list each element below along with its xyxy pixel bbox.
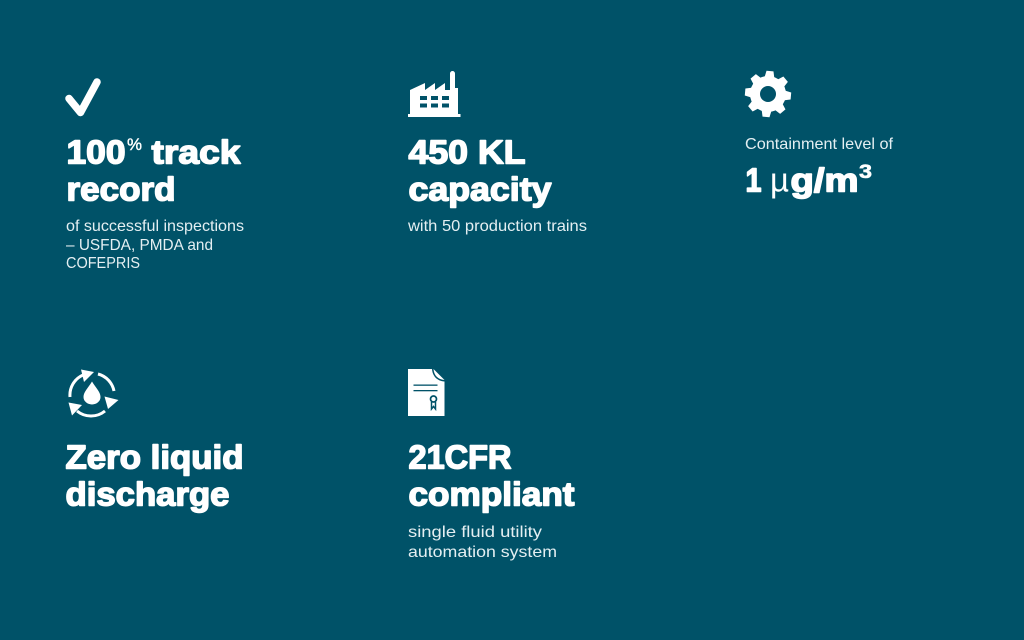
icon: factory <box>408 71 460 117</box>
heading: 450 KL capacity: 450 KL <box>408 134 526 170</box>
heading: 100% track record: % <box>127 135 142 154</box>
text: inspections detail: – USFDA, PMDA and <box>66 237 213 254</box>
icon: recycling water drop <box>68 370 118 416</box>
panel: containment <box>745 71 894 200</box>
text: inspections detail: of successful inspections <box>66 218 244 235</box>
panel: capacity <box>407 71 587 235</box>
icon: gear <box>745 71 791 117</box>
panel: track record <box>66 82 244 272</box>
heading: Zero liquid discharge: discharge <box>66 476 230 512</box>
heading: 1 µg/m³: 3 <box>859 162 872 183</box>
heading: 21CFR compliant: 21CFR <box>408 438 512 476</box>
heading: 450 KL capacity <box>408 134 552 208</box>
heading: 1 µg/m³: 1 <box>746 162 762 198</box>
text: automation system <box>408 524 557 561</box>
heading: 21CFR compliant: compliant <box>408 476 574 512</box>
text: automation system: automation system <box>408 544 557 561</box>
icon: check mark <box>69 82 97 112</box>
heading: 100% track record <box>66 134 241 208</box>
panel: 21CFR compliance <box>408 369 574 561</box>
heading: 100% track record: 100 <box>66 134 126 170</box>
heading: 100% track record: record <box>66 170 176 208</box>
heading: Zero liquid discharge <box>66 438 243 512</box>
text: automation system: single fluid utility <box>408 524 542 541</box>
heading: 21CFR compliant <box>408 438 574 512</box>
text: inspections detail <box>66 218 244 272</box>
heading: 1 µg/m³: µ <box>770 162 789 200</box>
heading: 450 KL capacity: capacity <box>408 170 552 208</box>
panel: zero liquid discharge <box>66 370 243 512</box>
heading: 100% track record: track <box>152 134 241 170</box>
heading: Zero liquid discharge: Zero liquid <box>66 438 243 476</box>
text: inspections detail: COFEPRIS <box>66 255 140 272</box>
heading: 1 µg/m³: g/m <box>790 162 858 198</box>
text: production trains: with 50 production trains <box>407 218 587 235</box>
heading: 1 µg/m³ <box>746 162 872 200</box>
icon: certificate document <box>408 369 444 416</box>
text: containment level: Containment level of <box>745 136 894 153</box>
